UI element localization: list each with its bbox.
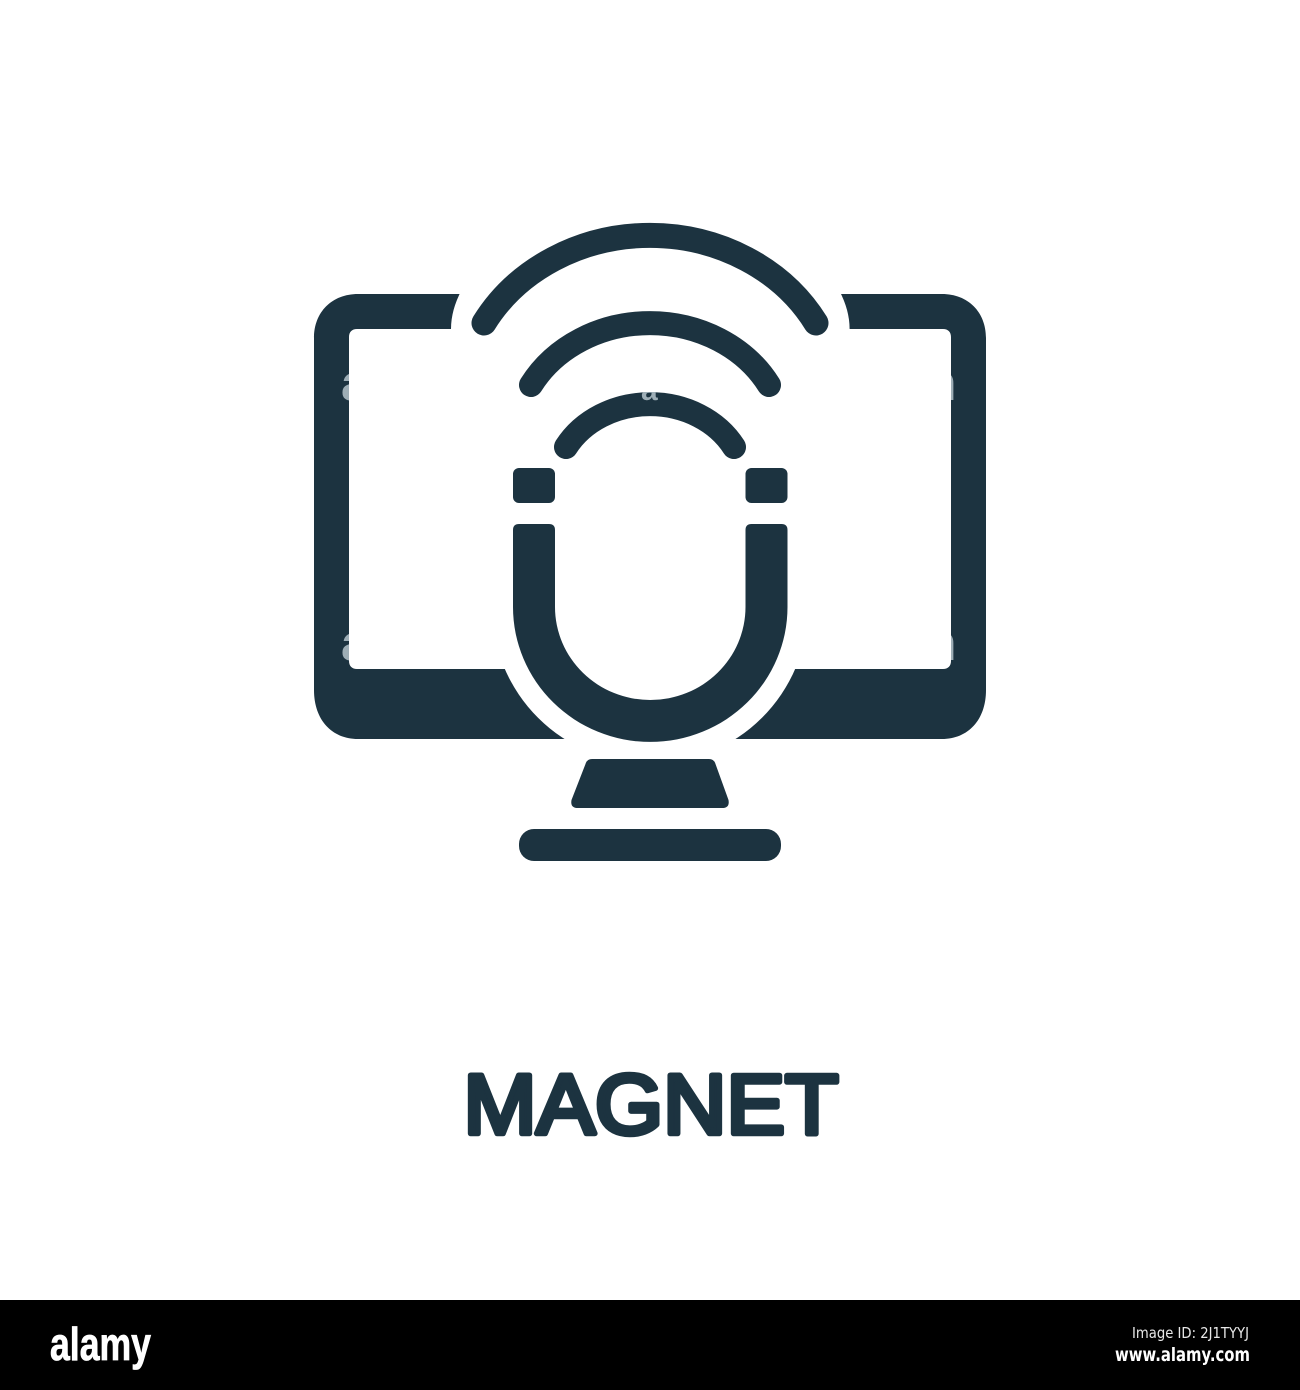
watermark fragments on monitor frame: a [341, 355, 370, 411]
icon: inner magnetic wave [566, 404, 734, 447]
icon: horseshoe magnet body [513, 524, 788, 742]
watermark fragments on monitor frame: m [912, 615, 956, 671]
icon: outer magnetic wave [484, 235, 816, 323]
icon: right magnet pole [746, 468, 788, 503]
title: MAGNET [464, 1058, 838, 1152]
footer logo: alamy [50, 1318, 151, 1370]
footer website: www.alamy.com [1115, 1344, 1250, 1366]
footer image id: Image ID: 2J1TYYJ [1132, 1324, 1249, 1342]
watermark fragments on monitor frame: m [912, 355, 956, 411]
icon: monitor stand [571, 759, 729, 808]
watermark fragments on monitor frame: a [341, 615, 370, 671]
icon: magnet on computer monitor [314, 235, 986, 861]
watermark fragment on inner wave: a [641, 374, 658, 407]
footer bar [0, 1300, 1300, 1390]
icon: left magnet pole [513, 468, 555, 503]
icon: monitor frame [314, 290, 986, 764]
icon: middle magnetic wave [531, 323, 769, 385]
icon: monitor base [519, 829, 781, 861]
watermark fragments on monitor frame [341, 355, 956, 671]
